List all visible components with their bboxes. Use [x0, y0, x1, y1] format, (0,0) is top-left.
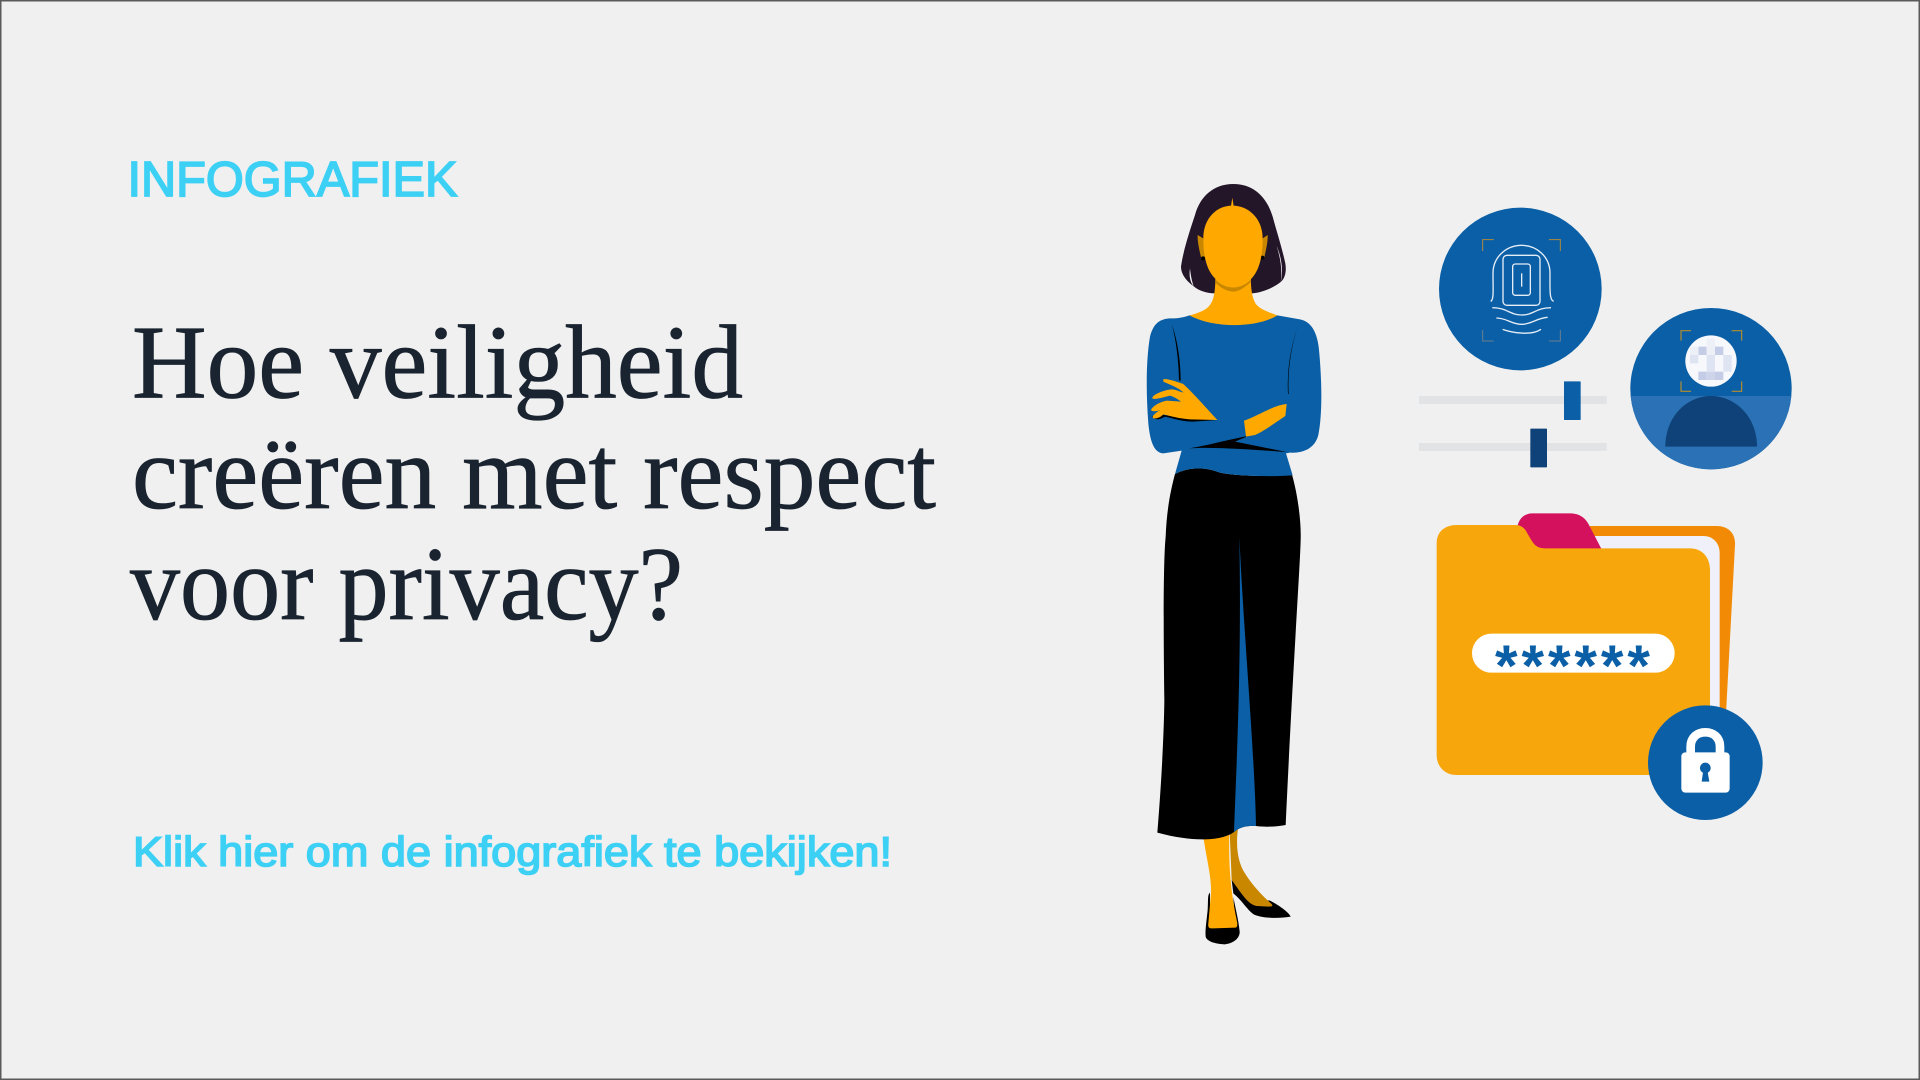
- hand shadow: [1152, 415, 1217, 422]
- sweater folds: [1172, 324, 1299, 452]
- right hand: [1244, 404, 1287, 437]
- password asterisks: ******: [1495, 634, 1654, 699]
- hair: [1181, 184, 1286, 293]
- illustration: woman with crossed arms: [1147, 184, 1321, 944]
- left hand: [1151, 379, 1217, 420]
- icon: padlock: [1648, 705, 1763, 820]
- back leg: [1229, 823, 1272, 907]
- trousers: [1157, 468, 1301, 839]
- face: [1203, 198, 1263, 287]
- slider tracks: [1419, 396, 1607, 451]
- label: INFOGRAFIEK: INFOGRAFIEK: [128, 153, 458, 207]
- slider handle bottom: [1530, 429, 1547, 467]
- slider handle top: [1564, 381, 1581, 420]
- front shoe: [1206, 893, 1240, 944]
- title: voor privacy?: [130, 525, 683, 642]
- icon: anonymised person circle: [1630, 308, 1792, 469]
- back shoe: [1232, 880, 1291, 918]
- icon: fingerprint circle: [1439, 208, 1602, 370]
- front leg: [1203, 833, 1237, 928]
- fingerprint, face scan and sliders: [1419, 208, 1792, 469]
- title: [130, 304, 936, 642]
- sweater: [1147, 315, 1321, 476]
- title: Hoe veiligheid: [132, 304, 743, 420]
- title: creëren met respect: [132, 414, 936, 531]
- call to action text: Klik hier om de infografiek te bekijken!: [133, 828, 892, 875]
- folder back and paper: [1437, 513, 1735, 775]
- folder with password and lock: [1437, 513, 1763, 820]
- neck and ears: [1189, 235, 1277, 330]
